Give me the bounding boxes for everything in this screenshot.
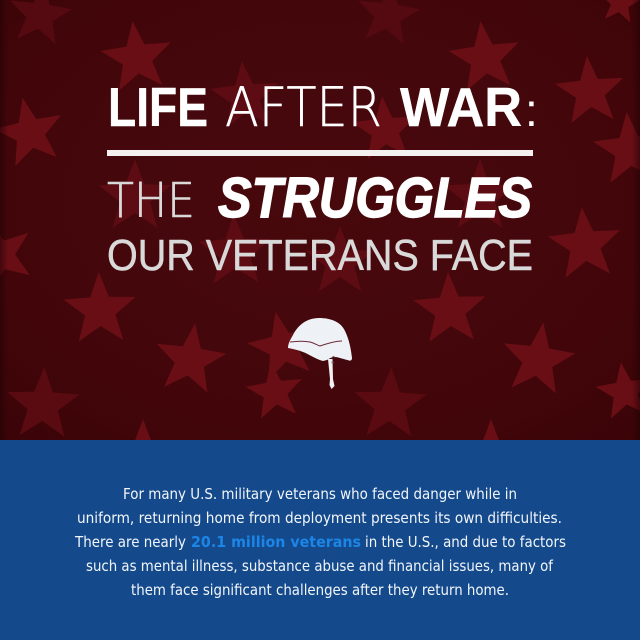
intro text block: in the U.S., and due to factors <box>365 533 566 551</box>
title line: Life After War: LIFE <box>108 76 208 138</box>
title line: Life After War: : <box>525 84 538 136</box>
panel: red star background <box>0 0 640 484</box>
title line: The Struggles <box>107 166 532 230</box>
intro text block: such as mental illness, substance abuse and financial issues, many of <box>86 557 554 575</box>
title rule <box>107 150 533 156</box>
icon: helmet <box>288 318 352 389</box>
title line: The Struggles: THE <box>107 173 195 229</box>
title <box>107 76 538 280</box>
intro text block: uniform, returning home from deployment presents its own difficulties. <box>77 509 562 527</box>
intro text block: There are nearly <box>74 533 186 551</box>
stars pattern <box>0 0 640 484</box>
intro text block: For many U.S. military veterans who faced danger while in <box>123 485 517 503</box>
title line: The Struggles: STRUGGLES <box>218 166 532 230</box>
title line: Our Veterans Face: OUR VETERANS FACE <box>107 231 533 280</box>
panel: blue intro <box>0 440 640 640</box>
title line: Life After War <box>108 76 538 139</box>
highlighted statistic: 20.1 million veterans <box>191 533 361 551</box>
title line: Life After War: AFTER <box>225 76 382 139</box>
intro text block: them face significant challenges after they return home. <box>131 581 509 599</box>
title line: Life After War: WAR <box>400 76 522 138</box>
intro text block <box>74 485 566 599</box>
